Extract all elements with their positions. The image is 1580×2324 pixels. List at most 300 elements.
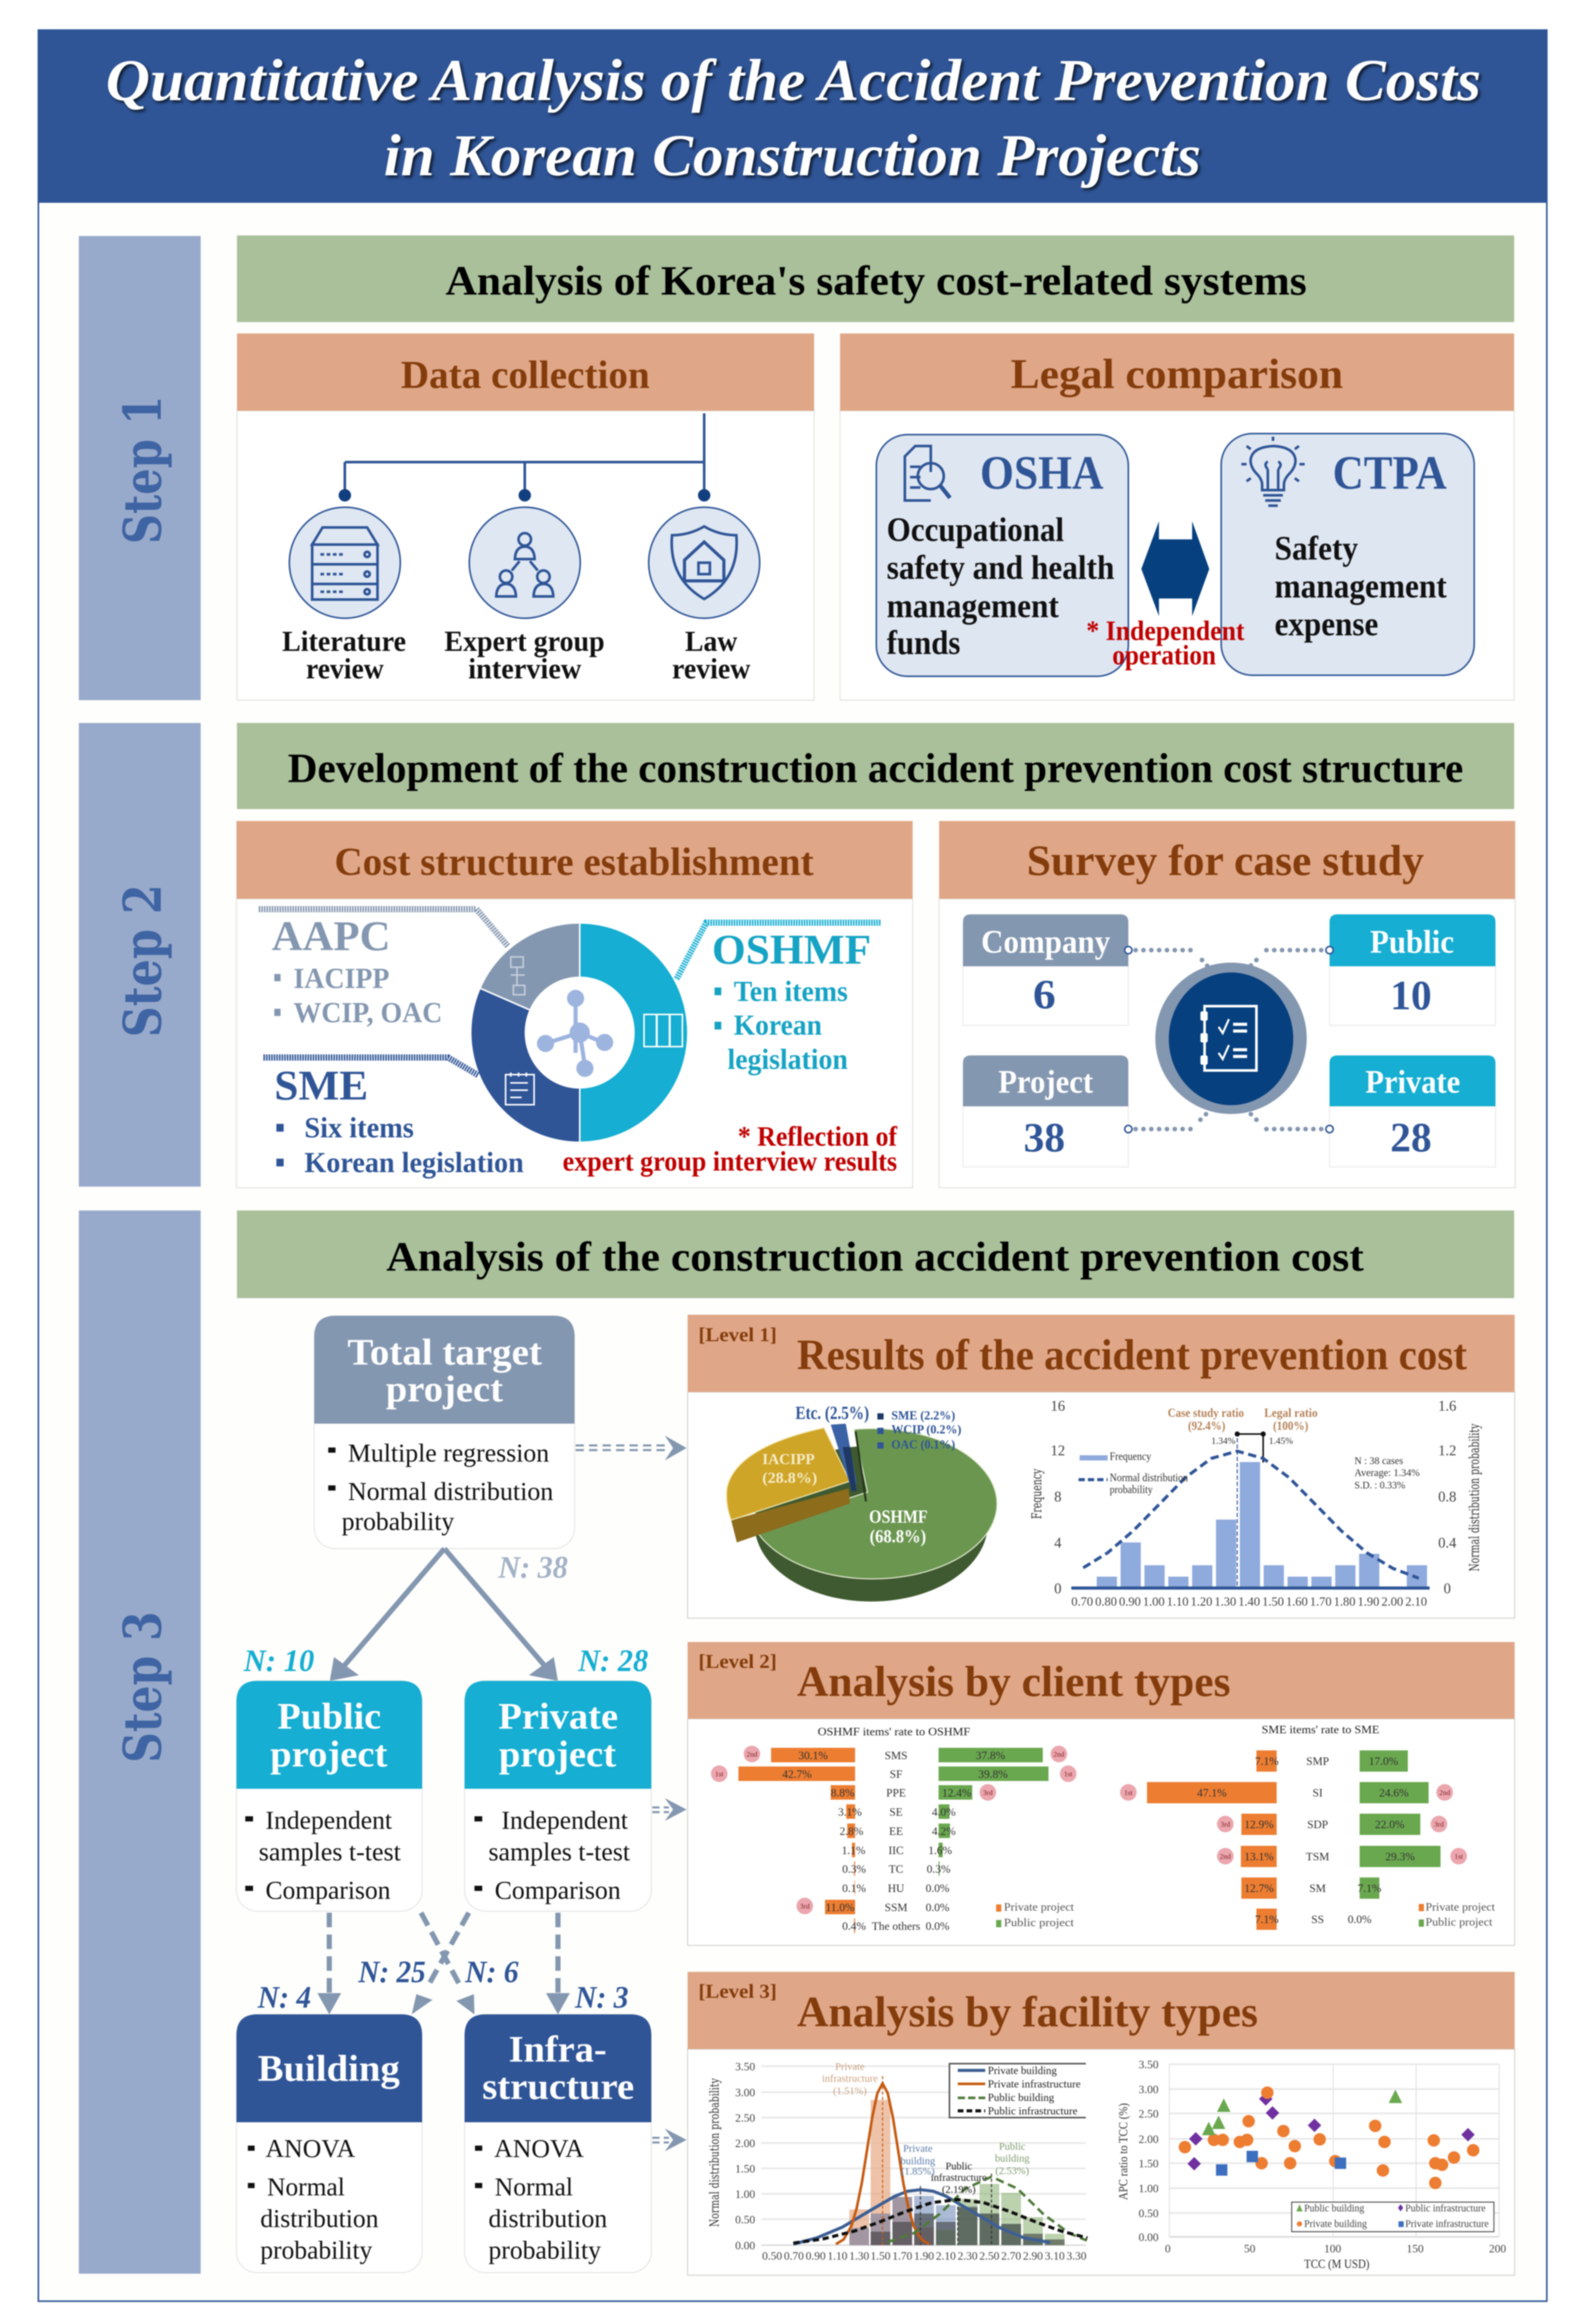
bar chart: SME items: SMP <box>1306 1755 1329 1768</box>
CTPA card: Safety <box>1275 530 1358 567</box>
bar chart: SME items: 17.0% <box>1369 1755 1398 1768</box>
histogram: 1.90 <box>1358 1595 1379 1609</box>
pie labels: SME (2.2%) <box>891 1409 955 1423</box>
CTPA card: CTPA <box>1333 446 1447 499</box>
pie labels: Etc. (2.5%) <box>795 1402 869 1423</box>
histogram: S.D. : 0.33% <box>1354 1480 1405 1491</box>
bar chart: OSHMF items: 2nd <box>747 1751 757 1759</box>
icon: expert group <box>469 507 580 618</box>
bar chart: OSHMF items: 37.8% <box>976 1749 1005 1762</box>
bar chart: SME items: 22.0% <box>1375 1818 1404 1831</box>
card: company <box>963 914 1128 1025</box>
pie labels <box>795 1402 961 1452</box>
bar chart: SME items: 2nd <box>1439 1789 1450 1797</box>
histogram: 2.10 <box>1405 1595 1427 1609</box>
expert label: Expert group <box>444 625 605 658</box>
distribution chart: 1.30 <box>849 2249 869 2262</box>
CTPA card: expense <box>1275 605 1378 643</box>
distribution chart <box>707 2060 1087 2262</box>
OSHMF text <box>712 926 871 1076</box>
panel: level 1 results <box>688 1315 1515 1618</box>
flow box: total target project: Normal distribution <box>348 1477 553 1506</box>
panel: level 1 results: Results of the accident prevention cost <box>797 1331 1467 1379</box>
panel: survey for case study: Survey for case study <box>1027 837 1424 885</box>
flow box: infrastructure: distribution <box>488 2204 607 2233</box>
distribution chart: 1.70 <box>892 2249 912 2262</box>
distribution chart: Public <box>945 2161 972 2172</box>
bar chart: SME items: 7.1% <box>1255 1755 1279 1768</box>
bar chart: OSHMF items: 3.1% <box>838 1805 862 1818</box>
flow box: infrastructure: probability <box>488 2235 601 2264</box>
flow box: infrastructure: Normal <box>495 2172 573 2201</box>
histogram: 1.6 <box>1438 1398 1456 1414</box>
bar chart: SME items: 13.1% <box>1245 1850 1274 1863</box>
bar chart: SME items: SI <box>1312 1786 1323 1799</box>
distribution chart: 3.00 <box>735 2086 755 2099</box>
arrow: double headed <box>1141 521 1209 616</box>
OSHMF text: Korean <box>734 1009 822 1041</box>
bar chart: SME items: 3rd <box>1434 1821 1444 1829</box>
bar chart: OSHMF items: 30.1% <box>799 1749 828 1762</box>
bar chart: SME items <box>1120 1723 1495 1930</box>
bar chart: OSHMF items: 0.3% <box>927 1862 950 1875</box>
bar chart: OSHMF items: The others <box>872 1919 920 1932</box>
law label <box>672 625 751 685</box>
SME text: SME <box>274 1062 368 1109</box>
bar chart: SME items: Public project <box>1425 1915 1492 1928</box>
scatter chart: 150 <box>1406 2242 1424 2255</box>
label: N 10: N: 10 <box>243 1644 314 1678</box>
arrow: total to level 1 <box>576 1436 687 1460</box>
bar chart: SME items: Private project <box>1425 1900 1495 1913</box>
bar chart: SME items: 7.1% <box>1255 1913 1279 1926</box>
label: N 3: N: 3 <box>575 1980 628 2014</box>
distribution chart: 1.00 <box>735 2188 755 2201</box>
AAPC text: WCIP, OAC <box>293 997 442 1029</box>
histogram <box>1029 1398 1483 1609</box>
bar chart: SME items: 12.7% <box>1245 1882 1274 1895</box>
flow box: private project: Private <box>498 1695 618 1737</box>
distribution chart: building <box>901 2155 935 2167</box>
flow box: building: Normal <box>267 2172 345 2201</box>
distribution chart: 2.00 <box>735 2137 755 2150</box>
histogram: Case study ratio <box>1168 1407 1244 1420</box>
distribution chart: 3.10 <box>1045 2249 1065 2262</box>
dotted connectors <box>1136 950 1321 1129</box>
panel: level 3 facility types <box>688 1972 1515 2275</box>
label: N 28: N: 28 <box>578 1644 648 1678</box>
bar chart: SME items: TSM <box>1306 1850 1330 1863</box>
law label: review <box>672 653 751 685</box>
connector end rings <box>1125 947 1333 1133</box>
OSHMF leader <box>676 923 880 980</box>
CTPA card <box>1221 434 1474 675</box>
histogram: 1.00 <box>1143 1595 1165 1609</box>
dashed arrows: project to facility <box>317 1913 570 2014</box>
bar chart: SME items: 24.6% <box>1379 1786 1408 1799</box>
scatter chart: 50 <box>1244 2242 1255 2255</box>
bar chart: SME items: 3rd <box>1221 1821 1230 1829</box>
bar chart: OSHMF items: SSM <box>885 1901 907 1914</box>
histogram: 16 <box>1051 1398 1065 1414</box>
icon: literature server <box>289 507 400 618</box>
distribution chart: 1.10 <box>828 2249 847 2262</box>
flow box: public project: Independent <box>265 1805 392 1834</box>
distribution chart: (2.53%) <box>996 2165 1029 2177</box>
icon: law shield <box>649 507 760 618</box>
histogram: 1.70 <box>1310 1595 1332 1609</box>
flow box: infrastructure: ANOVA <box>494 2134 584 2163</box>
panel: data collection <box>237 333 814 700</box>
distribution chart: 2.90 <box>1023 2249 1043 2262</box>
card: public: Public <box>1370 923 1454 960</box>
bar chart: OSHMF items: 0.3% <box>842 1862 866 1875</box>
distribution chart: 0.70 <box>784 2249 804 2262</box>
panel: level 2 client types <box>688 1642 1515 1945</box>
flow box: public project: Public <box>277 1695 381 1737</box>
panel: cost structure establishment <box>236 821 913 1188</box>
step 2 column: Step 2 <box>112 884 173 1037</box>
scatter chart: 2.00 <box>1139 2133 1158 2146</box>
AAPC text: IACIPP <box>293 963 389 995</box>
arrow: private to level 2 <box>652 1798 687 1821</box>
bar chart: OSHMF items: 0.0% <box>926 1882 949 1895</box>
OSHMF text: OSHMF <box>712 926 871 973</box>
histogram: (92.4%) <box>1188 1420 1225 1433</box>
card: company: 6 <box>1033 972 1056 1018</box>
bar chart: SME items: SS <box>1311 1913 1324 1926</box>
distribution chart: (1.85%) <box>901 2166 934 2177</box>
arrow: total to public <box>330 1549 444 1681</box>
bar chart: OSHMF items: 1st <box>715 1771 723 1778</box>
flow box: private project: Independent <box>501 1805 628 1834</box>
step 3 heading: Analysis of the construction accident prevention cost <box>386 1233 1364 1280</box>
histogram: 2.00 <box>1381 1595 1403 1609</box>
flow box: public project <box>236 1681 422 1911</box>
flow box: building: distribution <box>260 2204 379 2233</box>
SME leader <box>263 1057 478 1075</box>
panel: level 2 client types: [Level 2] <box>698 1651 777 1673</box>
bar chart: OSHMF items: SE <box>889 1805 903 1818</box>
distribution legend: Public building <box>988 2091 1054 2104</box>
step 2 heading: Development of the construction accident prevention cost structure <box>288 745 1463 791</box>
step 1 column: Step 1 <box>112 396 173 544</box>
callout: reflection <box>563 1121 898 1177</box>
distribution chart: 2.50 <box>980 2249 999 2262</box>
bar chart: OSHMF items: SF <box>890 1768 902 1780</box>
title banner <box>38 30 1547 203</box>
bar chart: SME items: 1st <box>1455 1853 1463 1861</box>
bar chart: OSHMF items: 4.2% <box>932 1825 956 1838</box>
histogram: 8 <box>1054 1489 1061 1505</box>
OSHMF text: legislation <box>728 1043 848 1076</box>
histogram: 0.90 <box>1119 1595 1141 1609</box>
distribution chart: 0.50 <box>762 2249 782 2262</box>
bar chart: OSHMF items: TC <box>889 1862 903 1875</box>
histogram: Average: 1.34% <box>1354 1467 1420 1479</box>
histogram: (100%) <box>1273 1420 1308 1433</box>
card: project: 38 <box>1024 1115 1065 1161</box>
card: project <box>963 1055 1128 1167</box>
histogram: 1.2 <box>1438 1443 1456 1459</box>
distribution legend: Public infrastructure <box>988 2105 1078 2117</box>
distribution chart: Private <box>903 2143 932 2154</box>
histogram: 1.10 <box>1167 1595 1189 1609</box>
SME text: Korean legislation <box>304 1147 524 1179</box>
bar chart: OSHMF items: 11.0% <box>826 1901 855 1914</box>
OSHA card: Occupational <box>887 511 1064 549</box>
step 2 heading <box>237 723 1514 809</box>
scatter chart: 1.50 <box>1139 2157 1158 2170</box>
card: company: Company <box>981 923 1110 960</box>
scatter chart: APC ratio to TCC (%) <box>1117 2103 1130 2200</box>
card: public: 10 <box>1390 973 1432 1019</box>
histogram: 1.50 <box>1262 1595 1284 1609</box>
scatter chart: 3.00 <box>1139 2083 1158 2096</box>
bar chart: OSHMF items: 3rd <box>800 1903 809 1911</box>
flow box: building: ANOVA <box>265 2134 355 2163</box>
card: private: Private <box>1365 1063 1460 1100</box>
bar chart: OSHMF items: Private project <box>1004 1900 1074 1913</box>
histogram: 0.70 <box>1071 1595 1093 1609</box>
scatter chart <box>1117 2058 1506 2271</box>
OSHA card: safety and health <box>887 549 1114 587</box>
connector tree <box>339 413 710 502</box>
literature label: review <box>306 653 384 685</box>
panel: level 3 facility types: [Level 3] <box>698 1981 777 2002</box>
bar chart: OSHMF items: 1.6% <box>928 1844 952 1857</box>
bar chart: OSHMF items: IIC <box>888 1844 904 1857</box>
label: N 4: N: 4 <box>257 1980 311 2014</box>
scatter legend: Private building <box>1304 2218 1367 2230</box>
scatter chart: TCC (M USD) <box>1304 2258 1369 2271</box>
histogram: probability <box>1110 1483 1153 1496</box>
panel: cost structure establishment: Cost structure establishment <box>334 840 814 884</box>
AAPC text: AAPC <box>272 912 390 959</box>
OSHA card: OSHA <box>980 446 1103 499</box>
bar chart: OSHMF items: 4.0% <box>932 1805 956 1818</box>
bar chart: OSHMF items: 0.0% <box>926 1901 949 1914</box>
flow box: public project: samples t-test <box>259 1837 401 1866</box>
step 2 column <box>79 723 201 1187</box>
distribution chart: 3.30 <box>1067 2249 1086 2262</box>
bar chart: OSHMF items: 8.8% <box>831 1786 855 1799</box>
callout: independent operation: operation <box>1112 639 1216 671</box>
flow box: private project: samples t-test <box>488 1837 630 1866</box>
panel: level 1 results: [Level 1] <box>698 1324 777 1346</box>
flow box: infrastructure: structure <box>482 2066 634 2107</box>
distribution chart: 2.70 <box>1001 2249 1021 2262</box>
expert label: interview <box>468 653 582 685</box>
OSHA card: management <box>887 587 1059 625</box>
bar chart: SME items: 29.3% <box>1386 1850 1415 1863</box>
flow box: private project: project <box>499 1733 616 1775</box>
scatter chart: 100 <box>1324 2242 1341 2255</box>
bar chart: SME items: 12.9% <box>1245 1818 1274 1831</box>
bar chart: OSHMF items: EE <box>889 1825 903 1838</box>
histogram: Frequency <box>1110 1450 1151 1463</box>
histogram: 0.8 <box>1438 1489 1456 1505</box>
distribution chart: 0.00 <box>735 2239 755 2252</box>
bar chart: OSHMF items: HU <box>888 1882 904 1895</box>
distribution chart: 2.50 <box>735 2111 755 2124</box>
distribution chart: 1.50 <box>735 2162 755 2175</box>
scatter legend: Public building <box>1304 2203 1364 2214</box>
AAPC text <box>272 912 442 1029</box>
distribution chart: (2.19%) <box>942 2184 975 2195</box>
scatter legend: Private infrastructure <box>1405 2218 1489 2230</box>
literature label: Literature <box>282 625 406 658</box>
step 3 column: Step 3 <box>112 1611 173 1763</box>
bar chart: SME items: SM <box>1309 1882 1326 1895</box>
OSHMF text: Ten items <box>734 976 848 1008</box>
flow box: public project: project <box>270 1733 387 1775</box>
OSHA card: funds <box>887 624 960 662</box>
bar chart: OSHMF items <box>711 1725 1076 1933</box>
SME text: Six items <box>304 1112 414 1144</box>
flow box: public project: Comparison <box>265 1875 390 1904</box>
histogram: Legal ratio <box>1264 1407 1318 1420</box>
distribution chart: 1.50 <box>871 2249 890 2262</box>
bar chart: OSHMF items: 1.1% <box>842 1844 865 1857</box>
histogram: Normal distribution <box>1110 1471 1188 1484</box>
histogram: 1.45% <box>1269 1436 1293 1446</box>
distribution chart: 2.10 <box>936 2249 956 2262</box>
histogram: 1.34% <box>1211 1436 1235 1446</box>
callout: independent operation <box>1086 615 1245 671</box>
3D pie chart: (68.8%) <box>870 1526 926 1547</box>
step 1 heading: Analysis of Korea's safety cost-related systems <box>445 257 1307 304</box>
histogram: 0 <box>1444 1581 1451 1597</box>
flow box: total target project: project <box>386 1368 503 1410</box>
distribution legend: Private infrastructure <box>988 2078 1081 2090</box>
bar chart: OSHMF items: SMS <box>885 1749 907 1762</box>
distribution chart: 3.50 <box>735 2060 755 2073</box>
distribution chart: building <box>995 2153 1029 2164</box>
flow box: building <box>236 2014 422 2273</box>
bar chart: SME items: 47.1% <box>1197 1786 1226 1799</box>
card: private: 28 <box>1390 1115 1432 1161</box>
distribution chart: 1.90 <box>914 2249 934 2262</box>
bar chart: OSHMF items: 0.4% <box>842 1919 866 1932</box>
callout: reflection: expert group interview results <box>563 1146 897 1177</box>
flow box: total target project: Total target <box>347 1331 542 1373</box>
flow box: private project <box>465 1681 651 1911</box>
AAPC leader <box>259 909 508 947</box>
histogram: 0.80 <box>1095 1595 1117 1609</box>
distribution chart: Public <box>999 2141 1026 2152</box>
scatter chart: 0.50 <box>1139 2207 1158 2220</box>
scatter chart: 1.00 <box>1139 2182 1158 2195</box>
law label: Law <box>685 625 738 658</box>
flow box: infrastructure <box>465 2014 651 2273</box>
histogram: Frequency <box>1029 1469 1045 1519</box>
donut chart <box>471 924 687 1142</box>
histogram: 1.60 <box>1286 1595 1308 1609</box>
histogram: 1.80 <box>1334 1595 1355 1609</box>
panel: survey for case study <box>939 821 1515 1188</box>
histogram: 1.30 <box>1214 1595 1236 1609</box>
step 1 column <box>79 236 201 700</box>
panel: level 2 client types: Analysis by client types <box>797 1658 1231 1706</box>
bar chart: OSHMF items: 2.8% <box>840 1825 863 1838</box>
histogram: N : 38 cases <box>1354 1455 1403 1467</box>
flow box: total target project: Multiple regression <box>348 1438 549 1467</box>
3D pie chart: (28.8%) <box>762 1469 817 1486</box>
OSHA card <box>876 435 1128 676</box>
bar chart: OSHMF items: 39.8% <box>978 1768 1008 1780</box>
panel: data collection: Data collection <box>401 353 650 397</box>
arrow: total to private <box>444 1549 558 1681</box>
distribution chart: 2.30 <box>958 2249 977 2262</box>
bar chart: OSHMF items: PPE <box>886 1786 906 1799</box>
bar chart: SME items: SME items' rate to SME <box>1262 1723 1379 1736</box>
icon: checklist medallion <box>1155 963 1307 1114</box>
scatter legend <box>1292 2202 1494 2232</box>
histogram: Normal distribution probability <box>1467 1424 1483 1571</box>
distribution chart: infrastructure <box>822 2073 878 2084</box>
SME text <box>274 1062 524 1179</box>
scatter chart: 0.00 <box>1139 2231 1158 2244</box>
3D pie chart: OSHMF <box>869 1506 928 1527</box>
title banner: in Korean Construction Projects <box>384 122 1201 188</box>
pie labels: OAC (0.1%) <box>891 1438 955 1452</box>
arrow: infrastructure to level 3 <box>652 2128 687 2151</box>
distribution chart: infrastructure <box>931 2172 987 2183</box>
scatter chart: 2.50 <box>1139 2107 1158 2120</box>
bar chart: OSHMF items: 42.7% <box>782 1768 812 1780</box>
flow box: total target project: probability <box>342 1507 454 1536</box>
distribution chart: Normal distribution probability <box>707 2078 722 2227</box>
distribution chart: 0.90 <box>806 2249 826 2262</box>
flow box: building: probability <box>260 2235 372 2264</box>
bar chart: OSHMF items: 3rd <box>983 1789 992 1797</box>
step 3 column <box>79 1210 201 2274</box>
label: N 6: N: 6 <box>465 1955 519 1989</box>
scatter chart: 0 <box>1165 2242 1171 2255</box>
label: N 38: N: 38 <box>498 1550 568 1584</box>
bar chart: OSHMF items: 0.1% <box>842 1882 866 1895</box>
panel: legal comparison: Legal comparison <box>1011 350 1343 397</box>
bar chart: SME items: 0.0% <box>1348 1913 1372 1926</box>
histogram: 0 <box>1054 1581 1061 1597</box>
bar chart: SME items: 2nd <box>1220 1853 1231 1861</box>
panel: legal comparison <box>840 333 1514 700</box>
callout: reflection: * Reflection of <box>738 1121 898 1152</box>
pie labels: WCIP (0.2%) <box>891 1423 961 1437</box>
bar chart: OSHMF items: 12.4% <box>942 1786 971 1799</box>
distribution legend: Private building <box>988 2064 1057 2077</box>
flow box: total target project <box>314 1316 575 1549</box>
distribution chart: (1.51%) <box>833 2085 866 2097</box>
histogram: 0.4 <box>1438 1535 1456 1551</box>
step 3 heading <box>237 1210 1514 1298</box>
scatter legend: Public infrastructure <box>1405 2203 1486 2214</box>
bar chart: SME items: 7.1% <box>1358 1882 1381 1895</box>
literature label <box>282 625 406 685</box>
scatter chart: 3.50 <box>1139 2058 1158 2071</box>
label: N 25: N: 25 <box>358 1955 426 1989</box>
distribution legend <box>949 2064 1086 2118</box>
card: private <box>1330 1055 1495 1167</box>
bar chart: SME items: 1st <box>1124 1789 1132 1797</box>
bar chart: OSHMF items: Public project <box>1004 1916 1074 1929</box>
histogram: 4 <box>1054 1535 1061 1551</box>
card: project: Project <box>998 1063 1094 1100</box>
panel: level 3 facility types: Analysis by facility types <box>797 1988 1258 2036</box>
histogram: 12 <box>1051 1443 1065 1459</box>
bar chart: OSHMF items: 2nd <box>1054 1751 1064 1759</box>
